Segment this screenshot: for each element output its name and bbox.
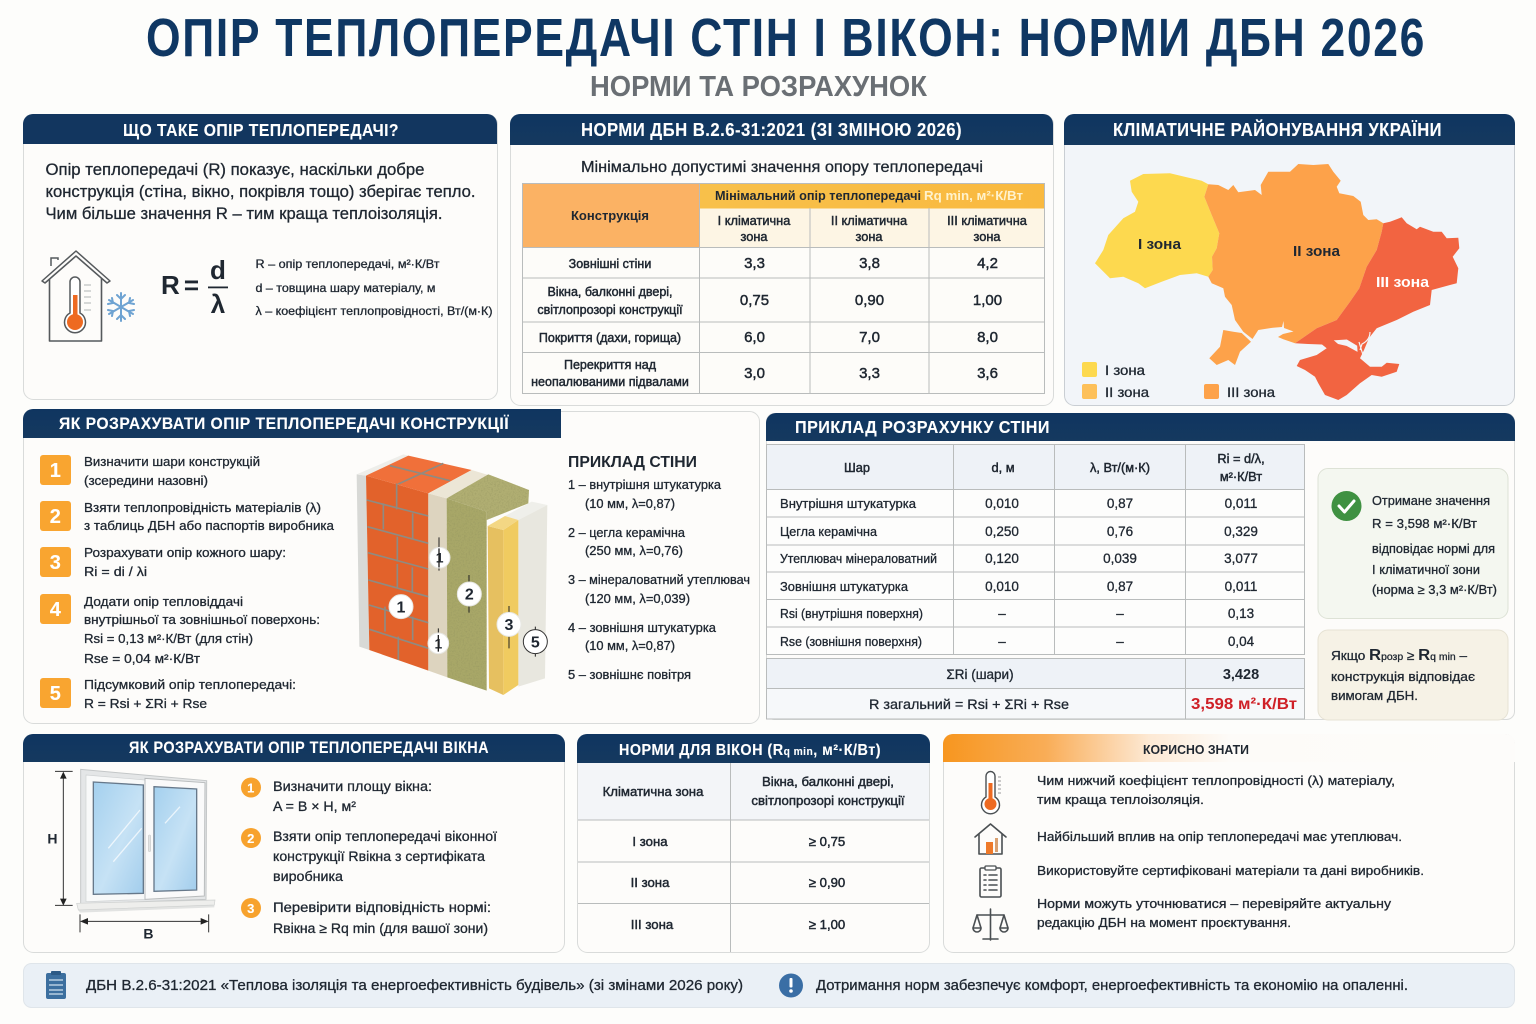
table: minimum resistance: 3,8 — [859, 255, 880, 272]
step 2 — [40, 500, 335, 533]
step 5: Підсумковий опір теплопередачі: — [84, 677, 296, 692]
window step 1: Визначити площу вікна: — [273, 779, 432, 794]
table: wall layers calculation — [766, 444, 1304, 719]
callout: compliance rule: конструкція відповідає — [1331, 669, 1475, 684]
callout: compliance rule — [1318, 630, 1508, 720]
table: minimum resistance: зона — [740, 229, 768, 244]
table: minimum resistance: ІІ кліматична — [831, 213, 908, 228]
table: wall layers calculation: 0,87 — [1107, 579, 1133, 594]
table caption: Мінімально допустимі значення опору теплопередачі — [581, 159, 983, 176]
step 4: Rsi = 0,13 м²·К/Вт (для стін) — [84, 631, 253, 646]
table: window norms: ≥ 0,75 — [809, 834, 845, 849]
legend: formula terms — [256, 257, 492, 318]
table: wall layers calculation: Утеплювач мінераловатний — [780, 552, 937, 566]
table: wall layers calculation: R загальний = Rsi + ΣRi + Rse — [869, 696, 1069, 712]
heading: DBN norms: НОРМИ ДБН В.2.6-31:2021 (ЗІ ЗМІНОЮ 2026) — [581, 120, 962, 140]
icon: clipboard — [980, 866, 1001, 897]
table: minimum resistance — [522, 184, 1044, 394]
table: wall layers calculation: 0,010 — [985, 579, 1019, 594]
formula: λ — [211, 289, 226, 319]
map label: zone II: ІІ зона — [1293, 243, 1341, 260]
table: minimum resistance: 1,00 — [973, 292, 1002, 309]
icon: info — [779, 974, 803, 998]
list: wall layers: 2 – цегла керамічна — [568, 526, 685, 540]
table: minimum resistance: зона — [973, 229, 1001, 244]
legend: zones: І зона — [1105, 362, 1145, 378]
heading: window norms: НОРМИ ДЛЯ ВІКОН (Rq min, м²·К/Вт) — [619, 742, 881, 759]
panel: DBN norms — [510, 114, 1054, 406]
map: zone I — [1095, 173, 1219, 288]
wall marker 4 top: 1 — [436, 550, 444, 566]
callout: compliance rule: вимогам ДБН. — [1331, 688, 1418, 703]
footer text: standard reference: ДБН В.2.6-31:2021 «Теплова ізоляція та енергоефективність будівель» (зі змінами 2026 року) — [86, 978, 743, 994]
map: Sivash water — [1335, 340, 1357, 351]
legend: zones: ІІ зона — [1105, 384, 1149, 400]
step 4: 4 — [50, 599, 62, 621]
list: wall layers: (10 мм, λ=0,87) — [585, 639, 675, 653]
heading: what is thermal resistance: ЩО ТАКЕ ОПІР ТЕПЛОПЕРЕДАЧІ? — [123, 120, 399, 140]
table: wall layers calculation: – — [1116, 634, 1124, 649]
wall marker 5: 5 — [531, 634, 540, 651]
panel: how to calculate window resistance — [23, 734, 565, 952]
table: wall layers calculation: 0,329 — [1224, 524, 1258, 539]
list: wall layers: 5 – зовнішнє повітря — [568, 668, 691, 682]
window step 2: виробника — [273, 869, 344, 884]
text block: useful notes: редакцію ДБН на момент проєктування. — [1037, 915, 1291, 930]
table: minimum resistance: 3,3 — [744, 255, 765, 272]
table: minimum resistance: 0,75 — [740, 292, 769, 309]
heading: window calculation: ЯК РОЗРАХУВАТИ ОПІР ТЕПЛОПЕРЕДАЧІ ВІКНА — [129, 739, 489, 757]
list: wall layers: (250 мм, λ=0,76) — [585, 544, 683, 558]
panel: climate zoning — [1064, 114, 1515, 406]
heading: useful to know: КОРИСНО ЗНАТИ — [1143, 742, 1249, 757]
list: wall layers: 4 – зовнішня штукатурка — [568, 621, 716, 635]
step 5: R = Rsi + ΣRi + Rse — [84, 696, 207, 711]
heading: wall example: ПРИКЛАД СТІНИ — [568, 454, 697, 471]
text block: useful notes: Найбільший вплив на опір теплопередачі має утеплювач. — [1037, 829, 1402, 844]
map label: zone III: ІІІ зона — [1376, 274, 1430, 291]
table: minimum resistance: 8,0 — [977, 329, 998, 346]
icon: scales — [973, 909, 1008, 940]
formula: d — [210, 255, 226, 285]
step 4: внутрішньої та зовнішньої поверхонь: — [84, 612, 320, 627]
table: minimum resistance: Конструкція — [571, 208, 649, 223]
table: minimum resistance: Вікна, балконні двері, — [547, 285, 673, 299]
table: window norms: І зона — [632, 834, 668, 849]
table: wall layers calculation: λ, Вт/(м·К) — [1090, 460, 1150, 475]
table: wall layers calculation: 0,87 — [1107, 496, 1133, 511]
heading: how to calculate: ЯК РОЗРАХУВАТИ ОПІР ТЕПЛОПЕРЕДАЧІ КОНСТРУКЦІЇ — [59, 414, 510, 433]
callout: result meets the norm: R = 3,598 м²·К/Вт — [1372, 517, 1477, 531]
table: wall layers calculation: 0,76 — [1107, 524, 1133, 539]
legend: formula terms: R – опір теплопередачі, м²·К/Вт — [256, 257, 440, 271]
panel: useful to know — [943, 734, 1515, 952]
table: wall layers calculation: 0,011 — [1225, 496, 1257, 511]
callout: result meets the norm: відповідає нормі для — [1372, 542, 1495, 556]
table: wall layers calculation: 0,120 — [985, 551, 1019, 566]
subtitle: НОРМИ ТА РОЗРАХУНОК — [590, 71, 927, 103]
list: wall layers: (120 мм, λ=0,039) — [585, 592, 690, 606]
table: wall layers calculation: 0,250 — [985, 524, 1019, 539]
table: minimum resistance: 3,6 — [977, 365, 998, 382]
panel: wall calculation example — [766, 413, 1515, 720]
step 4: Rse = 0,04 м²·К/Вт — [84, 651, 200, 666]
wall marker 3: 3 — [505, 617, 514, 634]
wall marker 4 bottom: 1 — [434, 635, 442, 651]
step 1 — [40, 454, 260, 488]
footer bar — [24, 964, 1514, 1008]
table: minimum resistance: Мінімальний опір теплопередачі — [715, 189, 921, 203]
legend: zones — [1082, 362, 1275, 400]
step 1: Визначити шари конструкцій — [84, 454, 260, 469]
table: window norms: ≥ 0,90 — [809, 875, 845, 890]
legend: formula terms: d – товщина шару матеріалу, м — [256, 281, 436, 295]
table: window norms: ІІ зона — [631, 875, 670, 890]
step 3 — [40, 545, 286, 579]
table: window norms: Кліматична зона — [603, 784, 704, 799]
window step 1 — [241, 778, 432, 814]
panel: window norms — [577, 734, 930, 952]
window step 2: конструкції Rвікна з сертифіката — [273, 849, 486, 864]
table: minimum resistance: 6,0 — [744, 329, 765, 346]
step 4 — [40, 594, 320, 666]
table: minimum resistance: Зовнішні стіни — [569, 257, 651, 271]
step 3: Розрахувати опір кожного шару: — [84, 545, 286, 560]
map: zone II — [1204, 164, 1383, 365]
text block: definition: конструкція (стіна, вікно, покрівля тощо) зберігає тепло. — [46, 183, 476, 201]
icon: thermometer — [982, 772, 1001, 814]
table: wall layers calculation: 3,598 м²·К/Вт — [1191, 696, 1297, 713]
table: minimum resistance: 4,2 — [977, 255, 998, 272]
table: minimum resistance: 3,0 — [744, 365, 765, 382]
step 5: 5 — [50, 683, 61, 705]
table: wall layers calculation: Rse (зовнішня поверхня) — [780, 635, 922, 649]
list: wall layers: 1 – внутрішня штукатурка — [568, 478, 721, 492]
step 4: Додати опір тепловіддачі — [84, 594, 243, 609]
legend: zones: ІІІ зона — [1227, 384, 1275, 400]
table: minimum resistance: ІІІ кліматична — [947, 213, 1028, 228]
table: minimum resistance: зона — [855, 229, 883, 244]
window step 3: 3 — [247, 901, 255, 916]
text block: useful notes: Норми можуть уточнюватися – перевіряйте актуальну — [1037, 896, 1392, 911]
step 2: з таблиць ДБН або паспортів виробника — [84, 518, 335, 533]
step 3: 3 — [50, 552, 61, 574]
map of Ukraine — [1095, 164, 1459, 400]
table: wall layers calculation: 0,04 — [1228, 634, 1255, 649]
window step 1: 1 — [247, 780, 255, 796]
step 2: Взяти теплопровідність матеріалів (λ) — [84, 500, 321, 515]
window step 3: Rвікна ≥ Rq min (для вашої зони) — [273, 921, 488, 936]
heading: calculation example: ПРИКЛАД РОЗРАХУНКУ СТІНИ — [795, 417, 1050, 437]
legend: formula terms: λ – коефіцієнт теплопровідності, Вт/(м·К) — [256, 304, 492, 318]
table: wall layers calculation: 0,010 — [985, 496, 1019, 511]
text block: useful notes — [1037, 773, 1424, 930]
callout: result meets the norm: (норма ≥ 3,3 м²·К/Вт) — [1372, 583, 1497, 597]
wall cross-section illustration — [357, 454, 547, 695]
table: wall layers calculation: Цегла керамічна — [780, 525, 877, 539]
table: wall layers calculation: Шар — [844, 460, 870, 475]
window step 1: A = B × H, м² — [273, 799, 357, 814]
map label: zone I: І зона — [1138, 236, 1182, 253]
heading: climate zoning: КЛІМАТИЧНЕ РАЙОНУВАННЯ УКРАЇНИ — [1113, 119, 1442, 140]
icon: document — [46, 971, 66, 999]
table: minimum resistance: 7,0 — [859, 329, 880, 346]
text block: useful notes: тим краща теплоізоляція. — [1037, 792, 1204, 807]
text block: definition — [46, 161, 476, 223]
formula: R = — [161, 270, 199, 300]
table: wall layers calculation: Ri = d/λ, — [1217, 451, 1265, 466]
table: wall layers calculation: 0,011 — [1225, 579, 1257, 594]
table: wall layers calculation: 0,039 — [1103, 551, 1137, 566]
table: window norms: світлопрозорі конструкції — [751, 793, 905, 808]
table: wall layers calculation: 3,077 — [1224, 551, 1258, 566]
dimension label H: H — [47, 830, 57, 846]
table: minimum resistance: Rq min, м²·К/Вт — [924, 189, 1023, 203]
window step 3 — [241, 898, 491, 936]
formula — [161, 255, 228, 319]
table: wall layers calculation: Rsi (внутрішня поверхня) — [780, 607, 923, 621]
step 3: Ri = di / λi — [84, 564, 147, 579]
table: window norms: Вікна, балконні двері, — [762, 774, 894, 789]
table: wall layers calculation: ΣRi (шари) — [946, 667, 1014, 682]
step 2: 2 — [50, 506, 61, 528]
step 5 — [40, 677, 296, 711]
window step 3: Перевірити відповідність нормі: — [273, 900, 491, 915]
callout: result meets the norm — [1318, 468, 1508, 618]
table: minimum resistance: 0,90 — [855, 292, 884, 309]
callout: result meets the norm: Отримане значення — [1372, 494, 1490, 508]
table: wall layers calculation: – — [1116, 606, 1124, 621]
table: wall layers calculation: м²·К/Вт — [1220, 469, 1262, 484]
table: minimum resistance: неопалюваними підвалами — [531, 375, 689, 389]
illustration: window with dimensions — [47, 769, 215, 941]
panel: how to calculate construction resistance — [23, 409, 760, 724]
table: minimum resistance: Перекриття над — [564, 358, 657, 372]
list: wall layers — [568, 478, 750, 682]
panel: what is thermal resistance — [23, 114, 498, 400]
text block: useful notes: Чим нижчий коефіцієнт теплопровідності (λ) матеріалу, — [1037, 773, 1395, 788]
wall marker 1: 1 — [397, 599, 406, 616]
wall marker 2: 2 — [465, 587, 474, 604]
map: zone III and Crimea — [1295, 217, 1459, 400]
table: window norms: ≥ 1,00 — [809, 917, 845, 932]
table: minimum resistance: І кліматична — [718, 213, 791, 228]
table: wall layers calculation: d, м — [991, 460, 1015, 475]
table: wall layers calculation: Внутрішня штукатурка — [780, 497, 916, 511]
text block: useful notes: Використовуйте сертифіковані матеріали та дані виробників. — [1037, 863, 1424, 878]
dimension label B: B — [143, 925, 153, 941]
icon: house — [975, 824, 1006, 854]
callout: compliance rule: Якщо Rрозр ≥ Rq min – — [1331, 647, 1468, 664]
icon: snowflake — [108, 293, 134, 321]
table: window norms — [578, 763, 929, 952]
window step 2: Взяти опір теплопередачі віконної — [273, 829, 497, 844]
step 1: 1 — [50, 460, 61, 482]
window step 2: 2 — [247, 831, 255, 846]
icon: house with thermometer — [42, 251, 110, 341]
table: minimum resistance: Покриття (дахи, горища) — [539, 331, 681, 345]
table: wall layers calculation: 0,13 — [1228, 606, 1254, 621]
footer text: benefits: Дотримання норм забезпечує комфорт, енергоефективність та економію на опаленні. — [816, 978, 1408, 994]
text block: definition: Опір теплопередачі (R) показує, наскільки добре — [46, 161, 424, 179]
table: wall layers calculation: 3,428 — [1223, 667, 1259, 683]
table: wall layers calculation: – — [998, 606, 1006, 621]
table: minimum resistance: 3,3 — [859, 365, 880, 382]
table: wall layers calculation: – — [998, 634, 1006, 649]
window step 2 — [241, 828, 497, 884]
step 1: (зсередини назовні) — [84, 473, 208, 488]
table: wall layers calculation: Зовнішня штукатурка — [780, 580, 908, 594]
list: wall layers: 3 – мінераловатний утеплювач — [568, 573, 750, 587]
table: window norms: ІІІ зона — [631, 917, 674, 932]
list: wall layers: (10 мм, λ=0,87) — [585, 497, 675, 511]
callout: result meets the norm: І кліматичної зони — [1372, 563, 1480, 577]
table: minimum resistance: світлопрозорі конструкції — [537, 303, 683, 317]
text block: definition: Чим більше значення R – тим краща теплоізоляція. — [46, 205, 442, 223]
